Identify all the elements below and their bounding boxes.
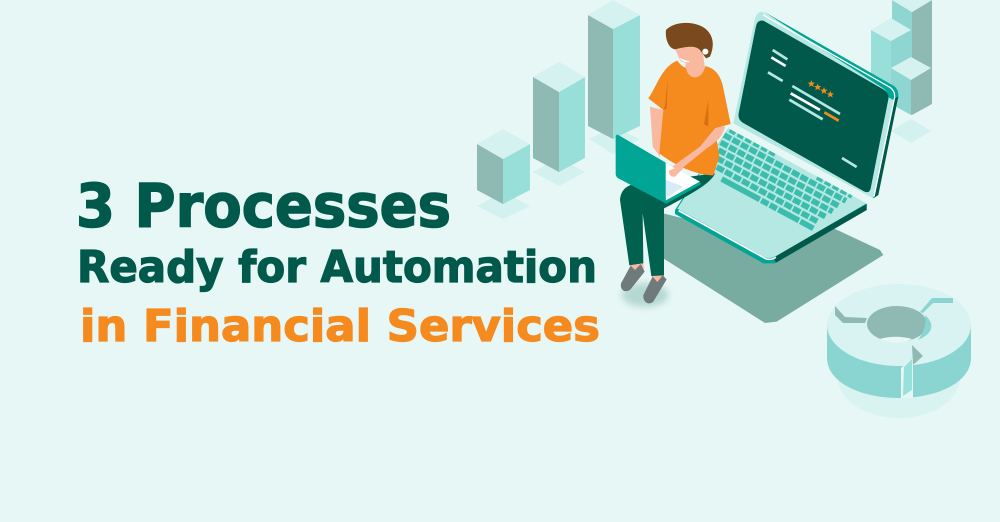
laptop base: [675, 128, 867, 263]
right forearm: [669, 126, 725, 177]
rating stars: [808, 80, 834, 98]
icon: circular process ring: [827, 284, 971, 418]
heading line: 3 Processes: 3 Processes: [76, 172, 451, 242]
small laptop: [616, 135, 701, 204]
shoes: [621, 264, 645, 291]
shirt sleeve shadow: [663, 79, 708, 127]
bar 3: [588, 0, 640, 154]
person with small laptop: [616, 23, 731, 307]
ear and earbud: [702, 49, 708, 55]
keyboard keys: [717, 131, 852, 228]
screen content: [768, 50, 857, 167]
ankles: [630, 263, 665, 283]
laptop lid: [733, 12, 898, 198]
laptop screen: [738, 20, 888, 192]
orange shirt: [648, 61, 731, 175]
smile: [680, 58, 689, 62]
laptop and person, drawn at 3x coordinates: [616, 11, 898, 323]
left arm: [650, 107, 663, 157]
floor shadow under feet: [622, 283, 668, 307]
laptop ground shadow: [663, 213, 883, 323]
face: [674, 43, 703, 63]
bar 1: [477, 129, 530, 219]
legs: [620, 173, 715, 277]
neck: [685, 57, 706, 79]
bar 2: [533, 62, 585, 186]
icon: isometric bar chart: [477, 0, 640, 219]
title: [76, 172, 600, 352]
hair: [666, 23, 713, 58]
heading line: in Financial Services: in Financial Services: [80, 301, 600, 352]
hand: [669, 166, 683, 177]
heading line: Ready for Automation: Ready for Automation: [77, 242, 597, 293]
icon: stacked cubes top right: [871, 0, 932, 143]
large laptop: [675, 11, 898, 263]
